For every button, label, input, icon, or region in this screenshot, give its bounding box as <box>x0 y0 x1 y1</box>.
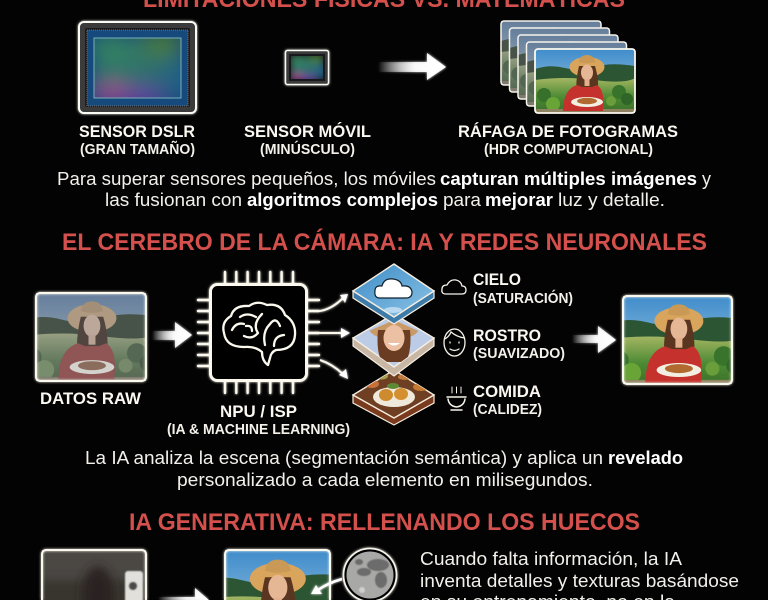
label: NPU / ISP: (IA & MACHINE LEARNING) <box>167 422 350 438</box>
layer: comida <box>353 370 434 425</box>
text block: capturas múltiples: algoritmos complejos <box>247 190 438 210</box>
text block: información inventada: inventa detalles y texturas basándose <box>420 571 739 591</box>
arrows: chip to layers <box>320 294 350 379</box>
label: cielo: CIELO <box>473 270 521 289</box>
text block: capturas múltiples: para <box>443 190 482 210</box>
icon: burst of frames <box>501 21 635 113</box>
label: sensor móvil: SENSOR MÓVIL <box>244 122 371 141</box>
text block: revelado personalizado: revelado <box>608 448 683 468</box>
icon: moon <box>344 548 396 600</box>
panel: generative fill <box>30 548 739 600</box>
icon: brain <box>223 303 295 365</box>
label: sensor móvil: (MINÚSCULO) <box>260 140 355 158</box>
icon: face <box>444 329 465 356</box>
label: NPU / ISP: NPU / ISP <box>220 402 297 421</box>
label: comida: COMIDA <box>473 382 541 401</box>
label: datos raw: DATOS RAW <box>40 389 142 408</box>
heading: el cerebro de la cámara: EL CEREBRO DE LA CÁMARA: IA Y REDES NEURONALES <box>62 228 707 256</box>
icon: mobile sensor <box>286 50 328 84</box>
text block: información inventada <box>420 549 739 600</box>
image: datos raw <box>19 293 159 382</box>
layer: cielo <box>353 264 434 324</box>
label: ráfaga de fotogramas: (HDR COMPUTACIONAL) <box>484 142 653 158</box>
text block: revelado personalizado: La IA analiza la escena (segmentación semántica) y aplica un <box>85 448 603 468</box>
arrow: layers to result <box>572 326 616 353</box>
arrow: blur to generated <box>158 588 209 600</box>
label: sensor móvil <box>244 122 371 158</box>
image: blurry source <box>30 550 160 600</box>
text block: revelado personalizado: personalizado a cada elemento en milisegundos. <box>177 470 593 490</box>
text block: capturas múltiples <box>57 169 711 210</box>
label: rostro: (SUAVIZADO) <box>473 346 565 362</box>
label: rostro: ROSTRO <box>473 326 541 345</box>
image: final result <box>606 296 746 385</box>
layer: rostro <box>353 312 434 376</box>
text block: capturas múltiples: capturan múltiples imágenes <box>440 169 697 189</box>
icon: cloud <box>442 280 466 294</box>
icon: DSLR sensor <box>79 22 196 113</box>
text block: información inventada: Cuando falta información, la IA <box>420 549 682 569</box>
text block: capturas múltiples: Para superar sensores pequeños, los móviles <box>57 169 436 189</box>
icon: stacked semantic layers <box>353 264 434 425</box>
text block: capturas múltiples: las fusionan con <box>105 190 242 210</box>
heading: IA generativa: IA GENERATIVA: RELLENANDO LOS HUECOS <box>129 509 640 536</box>
panel: AI pipeline <box>19 264 746 438</box>
label: cielo: (SATURACIÓN) <box>473 289 573 307</box>
label: NPU / ISP <box>167 402 350 438</box>
arrow: sensor to burst <box>378 53 446 80</box>
icon: chip with brain <box>198 272 319 393</box>
icon: bowl <box>447 387 466 410</box>
label: ráfaga de fotogramas: RÁFAGA DE FOTOGRAMAS <box>458 122 678 141</box>
panel: sensor comparison <box>79 21 678 158</box>
label: cielo <box>473 270 573 307</box>
label: sensor DSLR: SENSOR DSLR <box>79 122 195 141</box>
label: comida <box>473 382 542 418</box>
label: comida: (CALIDEZ) <box>473 402 542 418</box>
label: ráfaga de fotogramas <box>458 122 678 158</box>
label: sensor DSLR: (GRAN TAMAÑO) <box>80 140 195 158</box>
text block: capturas múltiples: y <box>702 169 711 189</box>
label: sensor DSLR <box>79 122 195 158</box>
text block: capturas múltiples: mejorar <box>485 190 553 210</box>
label: rostro <box>473 326 565 362</box>
text block: capturas múltiples: luz y detalle. <box>558 190 665 210</box>
arrow: raw to chip <box>152 322 192 348</box>
arrow: moon to photo <box>311 579 342 594</box>
image: generated detail <box>195 550 355 600</box>
text block: revelado personalizado <box>85 448 683 490</box>
